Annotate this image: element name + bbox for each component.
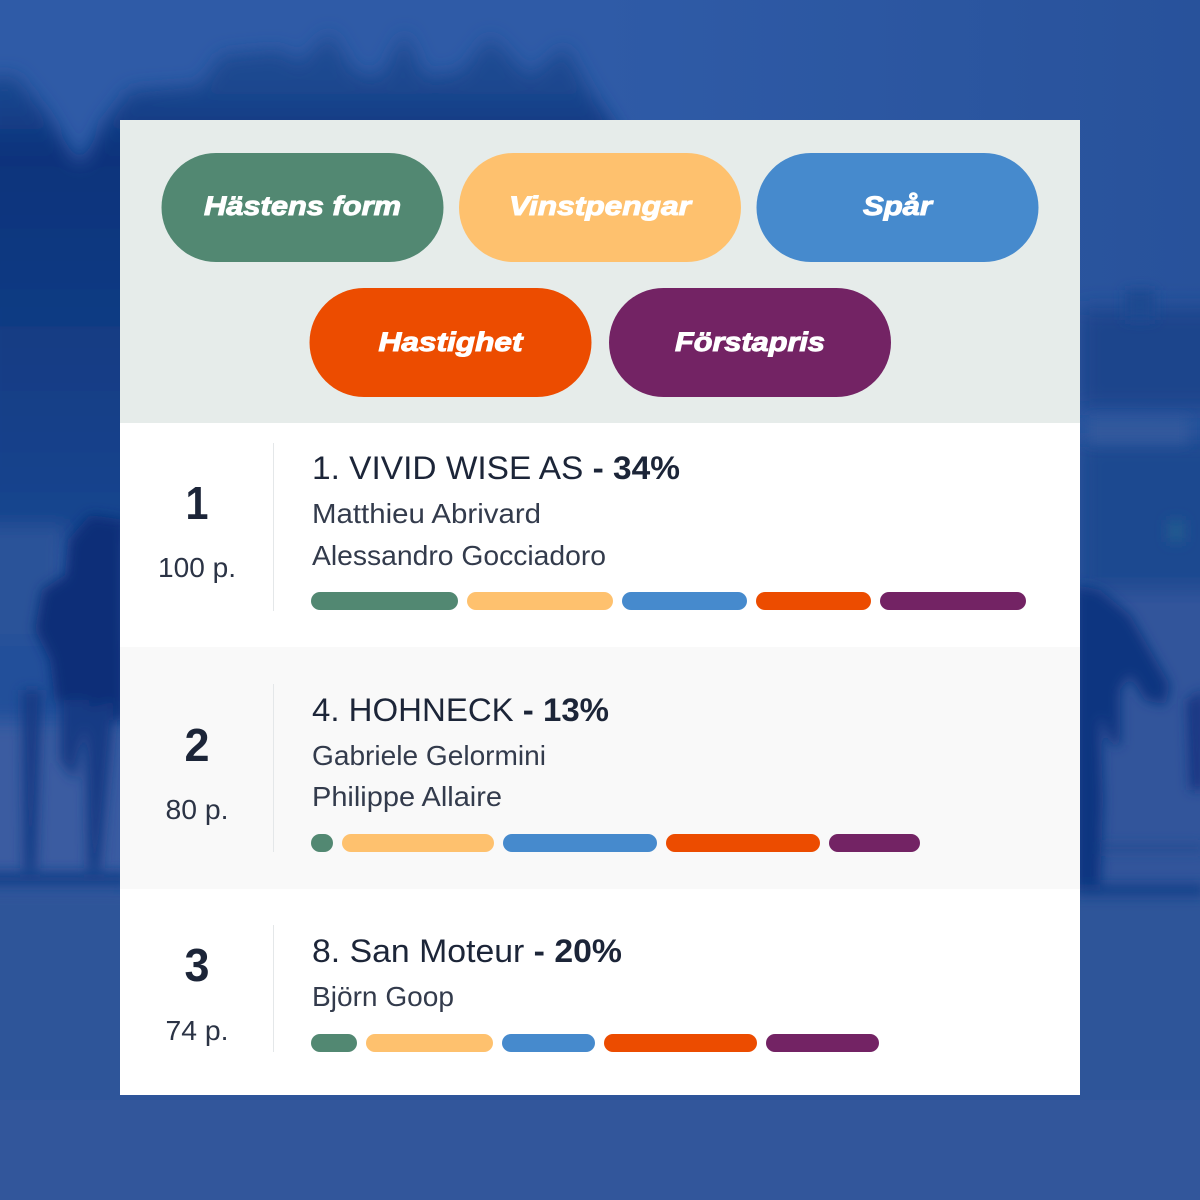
score bars 1 <box>311 592 1026 610</box>
legend pill: Spår: Spår <box>863 191 934 221</box>
points 80 p.: 80 p. <box>166 794 228 825</box>
panel: rank 2 row <box>120 647 1080 889</box>
horse name 2: 4. HOHNECK - 13% <box>312 692 609 728</box>
score bars 2 <box>311 834 920 852</box>
legend pill: Hästens form <box>162 153 444 262</box>
score bars 3 <box>311 1034 879 1052</box>
driver: Matthieu Abrivard <box>312 498 541 529</box>
legend pill: Hastighet <box>310 288 592 397</box>
legend pill: Förstapris <box>609 288 891 397</box>
panel: rank 1 row <box>120 423 1080 647</box>
legend pill: Spår <box>756 153 1038 262</box>
trainer: Alessandro Gocciadoro <box>312 540 606 571</box>
points 100 p.: 100 p. <box>158 552 236 583</box>
legend pill: Vinstpengar: Vinstpengar <box>509 191 693 221</box>
horse name 3: 8. San Moteur - 20% <box>312 933 622 969</box>
rank number 1: 1 <box>186 477 208 529</box>
driver: Björn Goop <box>312 981 454 1012</box>
rank number 3: 3 <box>184 939 210 991</box>
legend pill: Hastighet: Hastighet <box>378 327 524 357</box>
horse name 1: 1. VIVID WISE AS - 34% <box>312 450 680 486</box>
legend pill: Förstapris: Förstapris <box>675 327 825 357</box>
trainer: Philippe Allaire <box>312 781 502 812</box>
panel: legend <box>120 120 1080 423</box>
rank number 2: 2 <box>184 719 210 771</box>
driver: Gabriele Gelormini <box>312 740 546 771</box>
panel: rank 3 row <box>120 889 1080 1095</box>
legend pill: Vinstpengar <box>459 153 741 262</box>
points 74 p.: 74 p. <box>166 1015 228 1046</box>
legend pill: Hästens form: Hästens form <box>204 191 401 221</box>
